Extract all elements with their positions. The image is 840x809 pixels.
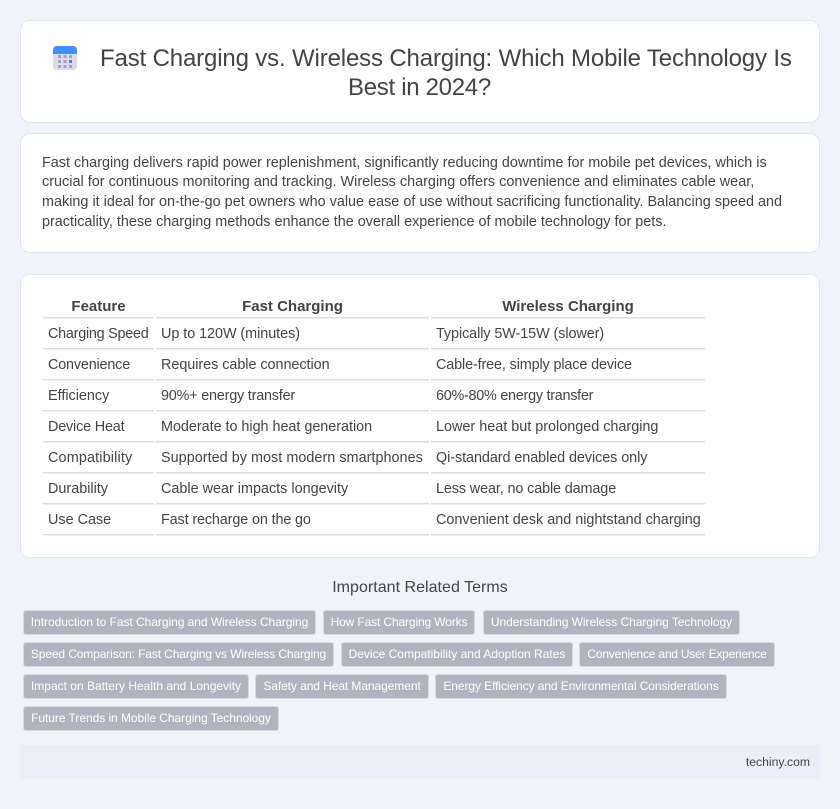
text block: introduction: making it ideal for on-the-go pet owners who value ease of use without sacrificing functionality. Balancing speed and: [42, 194, 782, 210]
related term tags: Introduction to Fast Charging and Wireless Charging: [31, 615, 308, 629]
title: [100, 45, 792, 101]
comparison table: Requires cable connection: [161, 357, 330, 373]
comparison table: Typically 5W-15W (slower): [436, 326, 604, 342]
footer source: techiny.com: [746, 755, 810, 769]
comparison table: Up to 120W (minutes): [161, 326, 300, 342]
comparison table: Qi-standard enabled devices only: [436, 450, 647, 466]
text block: introduction: crucial for continuous monitoring and tracking. Wireless charging offers convenience and eliminates cable wear,: [42, 174, 754, 190]
related term tags: Future Trends in Mobile Charging Technology: [31, 711, 271, 725]
comparison table: Feature: [71, 298, 126, 315]
comparison table: Less wear, no cable damage: [436, 481, 616, 497]
related term tags: [23, 610, 775, 731]
comparison table: Convenient desk and nightstand charging: [436, 512, 701, 528]
title: Best in 2024?: [348, 74, 491, 101]
comparison table: Cable wear impacts longevity: [161, 481, 348, 497]
comparison table: Device Heat: [48, 419, 124, 435]
text block: introduction: [42, 155, 782, 230]
related term tags: Impact on Battery Health and Longevity: [31, 679, 241, 693]
comparison table: Charging Speed: [48, 326, 149, 342]
related term tags: Convenience and User Experience: [587, 647, 767, 661]
related term tags: Energy Efficiency and Environmental Considerations: [443, 679, 719, 693]
related term tags: How Fast Charging Works: [331, 615, 467, 629]
panel: header: [20, 20, 820, 123]
comparison table: Supported by most modern smartphones: [161, 450, 423, 466]
comparison table: Use Case: [48, 512, 111, 528]
panel: comparison table: [20, 274, 820, 558]
related term tags: Understanding Wireless Charging Technology: [491, 615, 732, 629]
comparison table: Fast Charging: [242, 298, 343, 315]
comparison table: Wireless Charging: [502, 298, 634, 315]
panel: introduction: [20, 133, 820, 253]
related term tags: Safety and Heat Management: [263, 679, 421, 693]
related term tags: Speed Comparison: Fast Charging vs Wireless Charging: [31, 647, 326, 661]
comparison table: Efficiency: [48, 388, 109, 404]
comparison table: [43, 298, 705, 536]
text block: introduction: practicality, these charging methods enhance the overall experience of mobile technology for pets.: [42, 214, 666, 230]
comparison table: 60%-80% energy transfer: [436, 388, 593, 404]
comparison table: Compatibility: [48, 450, 132, 466]
comparison table: 90%+ energy transfer: [161, 388, 295, 404]
text block: introduction: Fast charging delivers rapid power replenishment, significantly reducing downtime for mobile pet devices, which is: [42, 155, 767, 171]
icon: calendar: [53, 46, 77, 70]
title: Fast Charging vs. Wireless Charging: Which Mobile Technology Is: [100, 45, 792, 72]
related term tags: Device Compatibility and Adoption Rates: [349, 647, 565, 661]
comparison table: Convenience: [48, 357, 130, 373]
footer: [20, 745, 820, 779]
comparison table: Fast recharge on the go: [161, 512, 311, 528]
comparison table: Cable-free, simply place device: [436, 357, 632, 373]
heading: related terms: Important Related Terms: [332, 579, 508, 596]
comparison table: Moderate to high heat generation: [161, 419, 372, 435]
comparison table: Lower heat but prolonged charging: [436, 419, 658, 435]
comparison table: Durability: [48, 481, 108, 497]
